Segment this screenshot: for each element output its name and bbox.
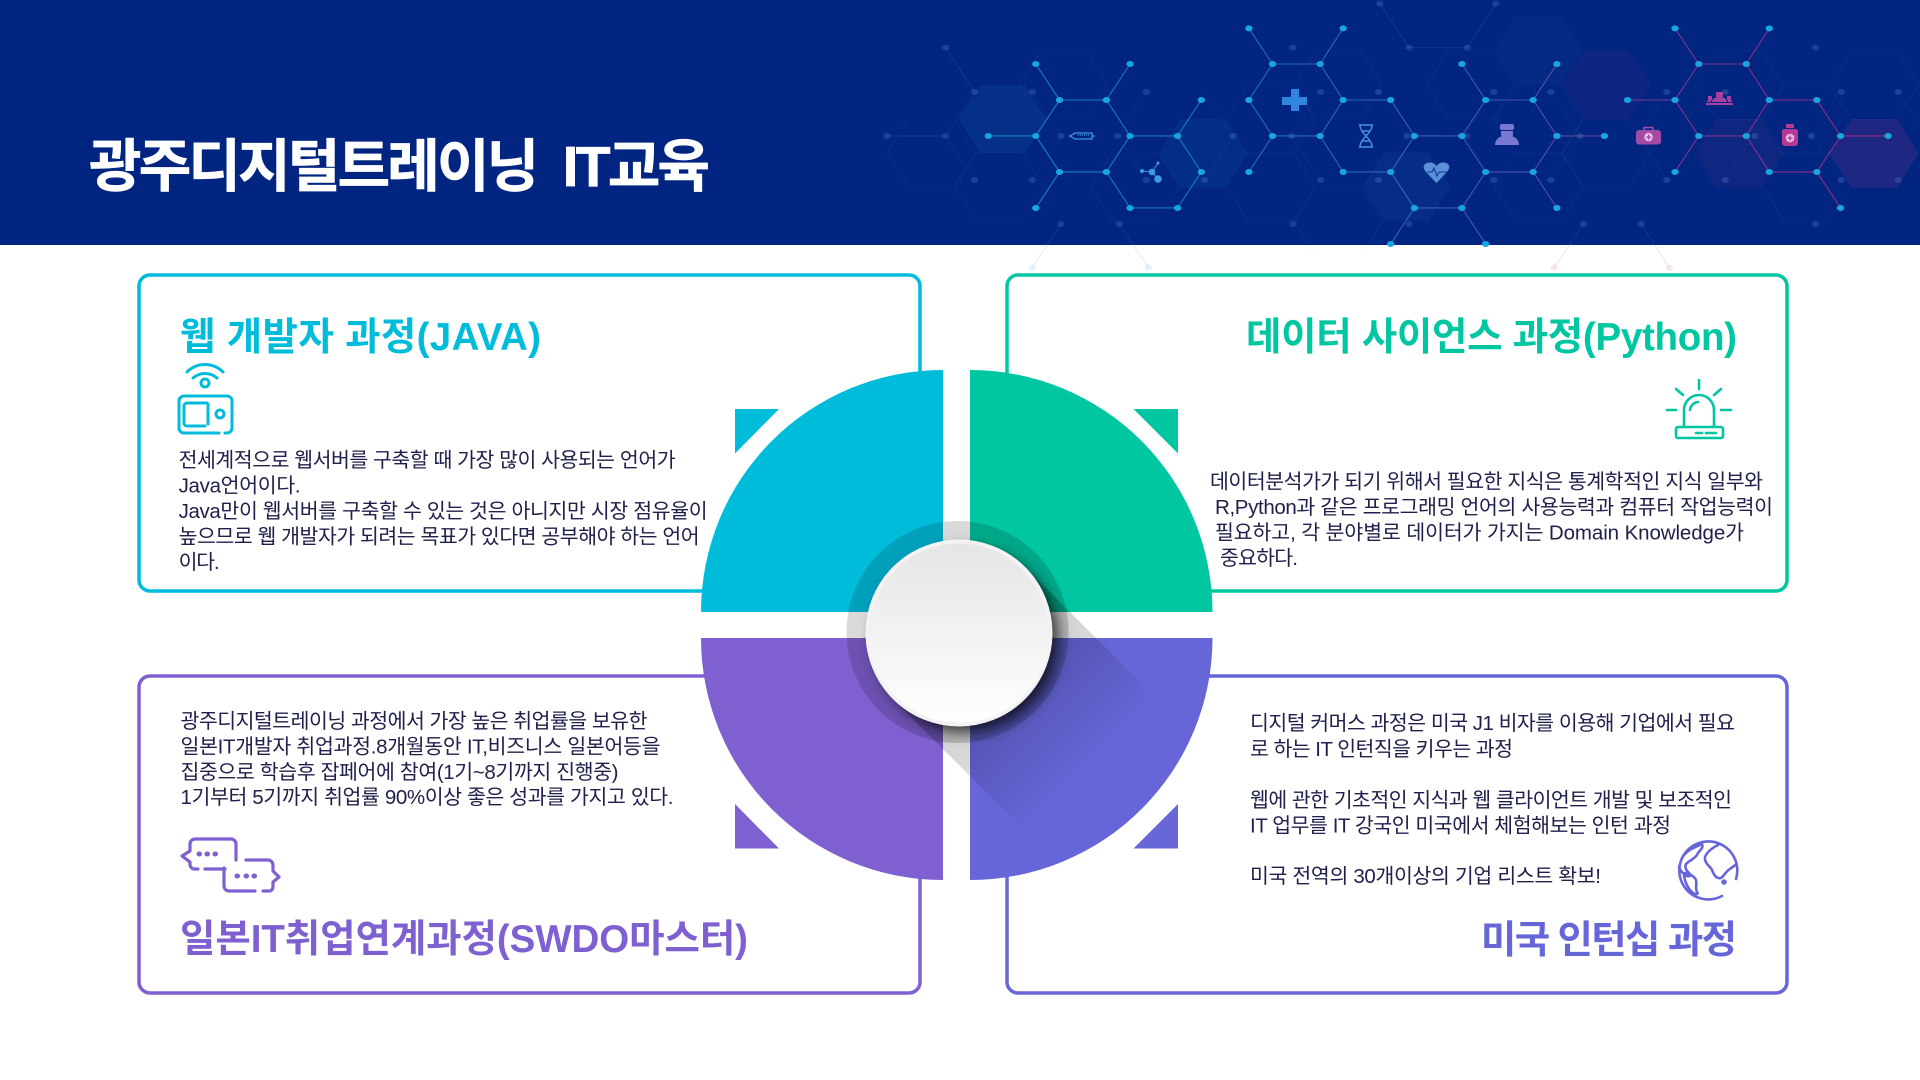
text block: web developer description: Java만이 웹서버를 구축할 수 있는 것은 아니지만 시장 점유율이 xyxy=(179,500,708,523)
text block: web developer description: 높으므로 웹 개발자가 되려는 목표가 있다면 공부해야 하는 언어 xyxy=(179,526,700,548)
panel: web developer course xyxy=(139,275,920,591)
text block: web developer description xyxy=(179,449,708,574)
icon: medical bag xyxy=(1636,128,1661,144)
text block: data science description: R,Python과 같은 프로그래밍 언어의 사용능력과 컴퓨터 작업능력이 xyxy=(1215,496,1773,519)
heading: US internship: 미국 인턴십 과정 xyxy=(1481,919,1737,962)
ring xyxy=(846,521,1068,743)
title: 광주디지털트레이닝 IT교육 xyxy=(89,135,710,199)
corner triangle: blue xyxy=(1134,804,1178,848)
text block: data science description: 중요하다. xyxy=(1220,547,1298,570)
text block: US internship description: 로 하는 IT 인턴직을 키우는 과정 xyxy=(1250,738,1513,761)
icon: molecule xyxy=(1140,162,1161,182)
long shadow xyxy=(893,567,1159,833)
text block: Japan course description: 광주디지털트레이닝 과정에서 가장 높은 취업률을 보유한 xyxy=(180,710,648,733)
center disc xyxy=(868,542,1050,724)
quadrant: green xyxy=(970,370,1212,612)
central quadrant diagram xyxy=(701,370,1212,880)
icon: siren xyxy=(1667,380,1731,438)
icon: chat bubbles xyxy=(182,839,279,891)
heading: Japan IT: 일본IT취업연계과정(SWDO마스터) xyxy=(180,918,748,961)
text block: web developer description: 이다. xyxy=(179,551,220,574)
text block: Japan course description: 1기부터 5기까지 취업률 90%이상 좋은 성과를 가지고 있다. xyxy=(180,786,674,809)
text block: web developer description: Java언어이다. xyxy=(179,474,301,498)
corner triangle: cyan xyxy=(735,409,779,454)
text block: Japan course description: 집중으로 학습후 잡페어에 참여(1기~8기까지 진행중) xyxy=(180,761,618,784)
icon: doctor xyxy=(1495,124,1519,145)
text block: US internship description: 웹에 관한 기초적인 지식과 웹 클라이언트 개발 및 보조적인 xyxy=(1250,789,1732,812)
text block: US internship description: 미국 전역의 30개이상의 기업 리스트 확보! xyxy=(1250,865,1601,888)
icon: globe xyxy=(1679,841,1737,899)
icon: medical cross xyxy=(1282,89,1307,111)
text block: US internship description: IT 업무를 IT 강국인 미국에서 체험해보는 인턴 과정 xyxy=(1250,814,1671,838)
quadrant: blue xyxy=(970,638,1212,880)
panel: US internship course xyxy=(1007,676,1787,993)
text block: web developer description: 전세계적으로 웹서버를 구축할 때 가장 많이 사용되는 언어가 xyxy=(179,449,676,472)
heading: data science: 데이터 사이언스 과정(Python) xyxy=(1246,316,1737,359)
header banner xyxy=(0,0,1920,245)
text block: Japan course description xyxy=(180,710,674,809)
text block: data science description: 필요하고, 각 분야별로 데이터가 가지는 Domain Knowledge가 xyxy=(1215,522,1744,544)
panel: data science course xyxy=(1007,275,1787,591)
heading: web developer: 웹 개발자 과정(JAVA) xyxy=(180,316,541,359)
corner triangle: green xyxy=(1134,409,1178,454)
icon: heart xyxy=(1424,162,1449,183)
icon: bottle xyxy=(1782,124,1798,146)
text block: Japan course description: 일본IT개발자 취업과정.8개월동안 IT,비즈니스 일본어등을 xyxy=(180,736,660,758)
panel: Japan IT employment course xyxy=(139,676,920,993)
header icons xyxy=(1070,89,1798,183)
text block: data science description xyxy=(1210,470,1773,570)
background pattern: hexagon lattice xyxy=(883,1,1920,271)
text block: US internship description xyxy=(1250,712,1735,888)
quadrant: purple xyxy=(701,638,943,880)
disc shadow xyxy=(874,548,1058,732)
text block: US internship description: 디지털 커머스 과정은 미국 J1 비자를 이용해 기업에서 필요 xyxy=(1250,712,1735,735)
icon: syringe xyxy=(1070,133,1095,139)
icon: wifi device xyxy=(179,364,232,433)
text block: data science description: 데이터분석가가 되기 위해서 필요한 지식은 통계학적인 지식 일부와 xyxy=(1210,470,1763,494)
corner triangle: purple xyxy=(735,804,779,848)
icon: DNA helix xyxy=(1359,125,1373,147)
quadrant: cyan xyxy=(701,370,943,612)
icon: team xyxy=(1706,92,1733,105)
